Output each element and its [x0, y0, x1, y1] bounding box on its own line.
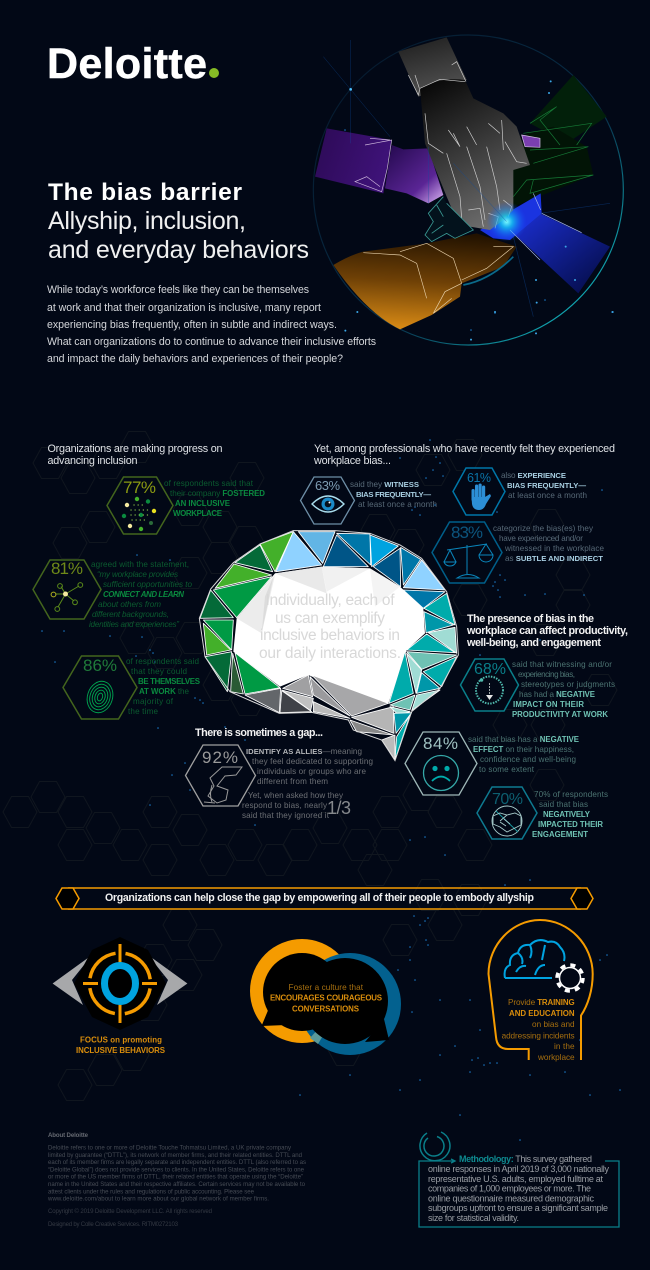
- action: training and education: [488, 920, 593, 1062]
- small outlined teal hand: [425, 197, 473, 242]
- stat: 81%: about others from: [98, 600, 161, 609]
- heading: progress on inclusion: Organizations are making progress on: [48, 443, 222, 455]
- stat: 68%: 68%: [474, 661, 506, 678]
- icon: overlapping speech bubbles: [250, 939, 401, 1055]
- brain message: [259, 592, 401, 662]
- Deloitte logo: Deloitte: [47, 40, 207, 88]
- heading: sometimes a gap: There is sometimes a gap...: [195, 727, 323, 739]
- stat: 61%: BIAS FREQUENTLY—: [507, 481, 586, 490]
- intro paragraph: experiencing bias frequently, often in subtle and indirect ways.: [47, 319, 337, 331]
- action: training and education: workplace: [537, 1053, 575, 1062]
- stat: 68%: experiencing bias,: [518, 670, 575, 679]
- stat: 86%: BE THEMSELVES: [138, 677, 200, 686]
- stat: 70%: [477, 787, 608, 839]
- icon: connected nodes: [51, 583, 83, 611]
- stat: 63%: 63%: [315, 478, 340, 493]
- stat: 68%: PRODUCTIVITY AT WORK: [512, 710, 608, 719]
- heading: professionals experiencing bias: [313, 443, 615, 467]
- icon: brain and gear: [505, 940, 583, 991]
- heading: presence of bias: workplace can affect productivity,: [466, 625, 628, 637]
- stat: 92% allies: 1/3: [327, 798, 351, 818]
- stat: 92% allies: 92%: [202, 748, 238, 767]
- stat: 83%: categorize the bias(es) they: [493, 524, 594, 533]
- methodology box: online questionnaire measured demographic: [428, 1194, 594, 1204]
- stat: 68%: [460, 659, 615, 719]
- grey facets: [245, 675, 395, 760]
- action: focus on inclusive behaviors: FOCUS on promoting: [80, 1036, 162, 1044]
- scattered star dots: [42, 130, 620, 1140]
- title: and everyday behaviors: [48, 236, 309, 264]
- stat: 81%: agreed with the statement,: [91, 560, 189, 569]
- stat: 84%: EFFECT on their happiness,: [473, 745, 574, 754]
- stat: 61%: 61%: [467, 471, 491, 485]
- stat: 70%: IMPACTED THEIR: [538, 820, 603, 829]
- intro paragraph: While today’s workforce feels like they can be themselves: [47, 284, 309, 296]
- heading: progress on inclusion: advancing inclusion: [48, 455, 138, 467]
- methodology box: [419, 1132, 619, 1227]
- green facets: [200, 532, 293, 694]
- stat: 61%: also EXPERIENCE: [501, 471, 566, 480]
- heading: professionals experiencing bias: Yet, among professionals who have recently felt they experienced: [314, 443, 615, 455]
- sleeve and hand: purple: [315, 128, 540, 203]
- intro paragraph: What can organizations do to continue to advance their inclusive efforts: [47, 336, 376, 348]
- action: focus on inclusive behaviors: [53, 937, 187, 1055]
- stat: 81%: identities and experiences”: [89, 620, 179, 629]
- icon: head outline: [488, 920, 593, 1060]
- stat: 61%: at least once a month: [508, 491, 587, 500]
- stat: 81%: different backgrounds,: [92, 610, 169, 619]
- stat: 86%: the time: [128, 707, 158, 716]
- brain message: inclusive behaviors in: [260, 627, 400, 644]
- stat: 92% allies: different from them: [257, 777, 328, 786]
- stat: 77%: AN INCLUSIVE: [175, 499, 230, 508]
- stat: 63%: [300, 477, 437, 524]
- heading: professionals experiencing bias: workplace bias...: [313, 455, 391, 467]
- stat: 77%: of respondents said that: [164, 479, 254, 488]
- methodology box: subgroups upfront to ensure a significant sample: [428, 1203, 608, 1213]
- stat: 68%: said that witnessing and/or: [512, 660, 612, 669]
- icon: circular arrows: [420, 1132, 450, 1161]
- title: [48, 179, 309, 264]
- stat: 92% allies: individuals or groups who are: [257, 767, 366, 776]
- sleeve and hand: blue: [480, 193, 610, 293]
- icon: fingerprint: [83, 678, 117, 716]
- stat: 84%: [405, 732, 579, 795]
- action: courageous conversations: CONVERSATIONS: [292, 1004, 359, 1014]
- brain message: Individually, each of: [266, 592, 395, 609]
- about Deloitte: About Deloitte: [48, 1132, 89, 1139]
- brain graphic: [199, 531, 458, 761]
- stat: 84%: 84%: [423, 734, 458, 753]
- icon: dot cluster: [122, 497, 156, 531]
- icon: raised hand: [472, 484, 491, 510]
- stat: 63%: at least once a month: [358, 500, 437, 509]
- action: courageous conversations: Foster a culture that: [288, 983, 364, 992]
- stat: 84%: confidence and well-being: [480, 755, 576, 764]
- brain message: our daily interactions.: [259, 645, 401, 662]
- stat: 61%: [453, 468, 587, 515]
- about Deloitte: Deloitte refers to one or more of Deloitte Touche Tohmatsu Limited, a UK private company: [48, 1144, 292, 1152]
- methodology box: online responses in April 2019 of 3,000 nationally: [428, 1164, 610, 1174]
- title: Allyship, inclusion,: [48, 207, 246, 235]
- heading: progress on inclusion: [48, 443, 222, 467]
- stat: 68%: stereotypes or judgments: [521, 680, 615, 689]
- about Deloitte: Designed by Colle Creative Services. RITM0272103: [48, 1221, 179, 1228]
- methodology box: representative U.S. adults, employed fulltime at: [428, 1174, 603, 1184]
- illustration: stacked hands in a circle: [313, 35, 623, 345]
- action: training and education: Provide TRAINING: [508, 998, 575, 1007]
- stat: 81%: CONNECT AND LEARN: [103, 590, 184, 599]
- stat: 92% allies: [186, 745, 373, 820]
- teal facets: [389, 593, 457, 760]
- stat: 81%: 81%: [51, 559, 83, 578]
- heading: presence of bias: The presence of bias in the: [467, 613, 594, 625]
- icon: crossed-out handshake: [492, 806, 522, 836]
- stat: 92% allies: respond to bias, nearly: [242, 801, 328, 810]
- about Deloitte: limited by guarantee (“DTTL”), its network of member firms, and their related entities. DTTL and: [48, 1152, 302, 1159]
- stat: 81%: sufficient opportunities to: [103, 580, 192, 589]
- about Deloitte: or more of the US member firms of DTTL, their related entities that operate using the “Deloitte”: [48, 1174, 303, 1181]
- icon: supporting hands: [204, 767, 242, 803]
- stat: 77%: 77%: [123, 478, 156, 497]
- stat: 92% allies: said that they ignored it: [242, 811, 330, 820]
- icon: eye: [312, 496, 344, 512]
- stat: 70%: 70%: [492, 791, 523, 808]
- stat: 63%: BIAS FREQUENTLY—: [356, 490, 431, 499]
- banner: [56, 888, 593, 909]
- about Deloitte: [47, 1132, 306, 1228]
- stat: 83%: as SUBTLE AND INDIRECT: [505, 554, 603, 563]
- stat: 77%: WORKPLACE: [173, 509, 222, 518]
- stat: 77%: their company FOSTERED: [170, 489, 265, 498]
- stat: 70%: ENGAGEMENT: [532, 830, 588, 839]
- stat: 86%: that they could: [131, 667, 187, 676]
- about Deloitte: each of its member firms are legally separate and independent entities. DTTL (also referred to as: [48, 1159, 306, 1166]
- stat: 86%: of respondents said: [126, 657, 199, 666]
- stat: 63%: said they WITNESS: [350, 480, 419, 489]
- stat: 86%: majority of: [133, 697, 174, 706]
- stat: 68%: has had a NEGATIVE: [519, 690, 595, 699]
- brain outline: [199, 531, 458, 761]
- action: training and education: in the: [554, 1042, 575, 1051]
- sleeve and hand: green: [508, 75, 607, 207]
- action: focus on inclusive behaviors: INCLUSIVE BEHAVIORS: [76, 1046, 165, 1055]
- about Deloitte: attest clients under the rules and regulations of public accounting. Please see: [48, 1188, 255, 1195]
- intro paragraph: [47, 284, 376, 365]
- sleeve and hand: grey: [398, 37, 530, 230]
- action: training and education: AND EDUCATION: [509, 1009, 575, 1018]
- action: training and education: addressing incidents: [502, 1032, 575, 1040]
- white centre of the brain: [233, 567, 425, 703]
- stat: 83%: 83%: [451, 523, 483, 542]
- stat: 83%: [432, 522, 604, 583]
- stat: 77%: [107, 477, 265, 534]
- heading: presence of bias: well-being, and engagement: [466, 637, 601, 649]
- about Deloitte: Copyright © 2019 Deloitte Development LLC. All rights reserved: [48, 1208, 212, 1215]
- stat: 70%: NEGATIVELY: [543, 810, 591, 819]
- intro paragraph: and impact the daily behaviors and experiences of their people?: [47, 353, 343, 365]
- stat: 68%: IMPACT ON THEIR: [513, 700, 584, 709]
- action: courageous conversations: [250, 939, 401, 1055]
- about Deloitte: www.deloitte.com/about to learn more about our global network of member firms.: [47, 1196, 269, 1203]
- stat: 81%: [33, 559, 192, 629]
- stat: 92% allies: they feel dedicated to supporting: [252, 757, 373, 766]
- stat: 86%: [63, 656, 200, 719]
- stat: 86%: 86%: [83, 656, 117, 675]
- methodology box: companies of 1,000 employees or more. The: [428, 1184, 591, 1194]
- methodology box: size for statistical validity.: [428, 1213, 519, 1223]
- title: The bias barrier: [48, 179, 242, 206]
- action: courageous conversations: ENCOURAGES COURAGEOUS: [270, 994, 382, 1002]
- stat: 84%: said that bias has a NEGATIVE: [468, 735, 579, 744]
- intro paragraph: at work and that their organization is inclusive, many report: [47, 302, 321, 314]
- glow and star flares: [323, 40, 610, 317]
- icon: sad face: [424, 756, 458, 790]
- action: training and education: on bias and: [532, 1020, 575, 1029]
- stat: 83%: witnessed in the workplace: [504, 544, 604, 553]
- stat: 83%: have experienced and/or: [499, 534, 583, 543]
- stat: 70%: 70% of respondents: [534, 790, 608, 799]
- stat: 81%: “my workplace provides: [97, 570, 178, 579]
- background hexagon pattern: [3, 432, 617, 1100]
- stat: 92% allies: Yet, when asked how they: [248, 791, 344, 800]
- blue facets: [276, 532, 445, 608]
- sleeve and hand: orange: [333, 233, 517, 329]
- stat: 70%: said that bias: [539, 800, 588, 809]
- banner: Organizations can help close the gap by empowering all of their people to embody allyship: [105, 892, 535, 904]
- icon: target eye: [53, 937, 187, 1030]
- icon: declining productivity dial: [476, 676, 503, 704]
- stat: 86%: AT WORK the: [139, 687, 189, 696]
- icon: scales: [444, 544, 493, 578]
- stat: 84%: to some extent: [479, 765, 535, 774]
- about Deloitte: name in the United States and their respective affiliates. Certain services may not be available to: [48, 1181, 306, 1188]
- about Deloitte: “Deloitte Global”) does not provide services to clients. In the United States, Deloitte refers to one: [48, 1166, 305, 1173]
- stat: 92% allies: IDENTIFY AS ALLIES—meaning: [246, 747, 362, 756]
- heading: presence of bias: [466, 613, 628, 649]
- methodology box: Methodology: This survey gathered: [459, 1154, 592, 1164]
- brain message: us can exemplify: [275, 610, 385, 627]
